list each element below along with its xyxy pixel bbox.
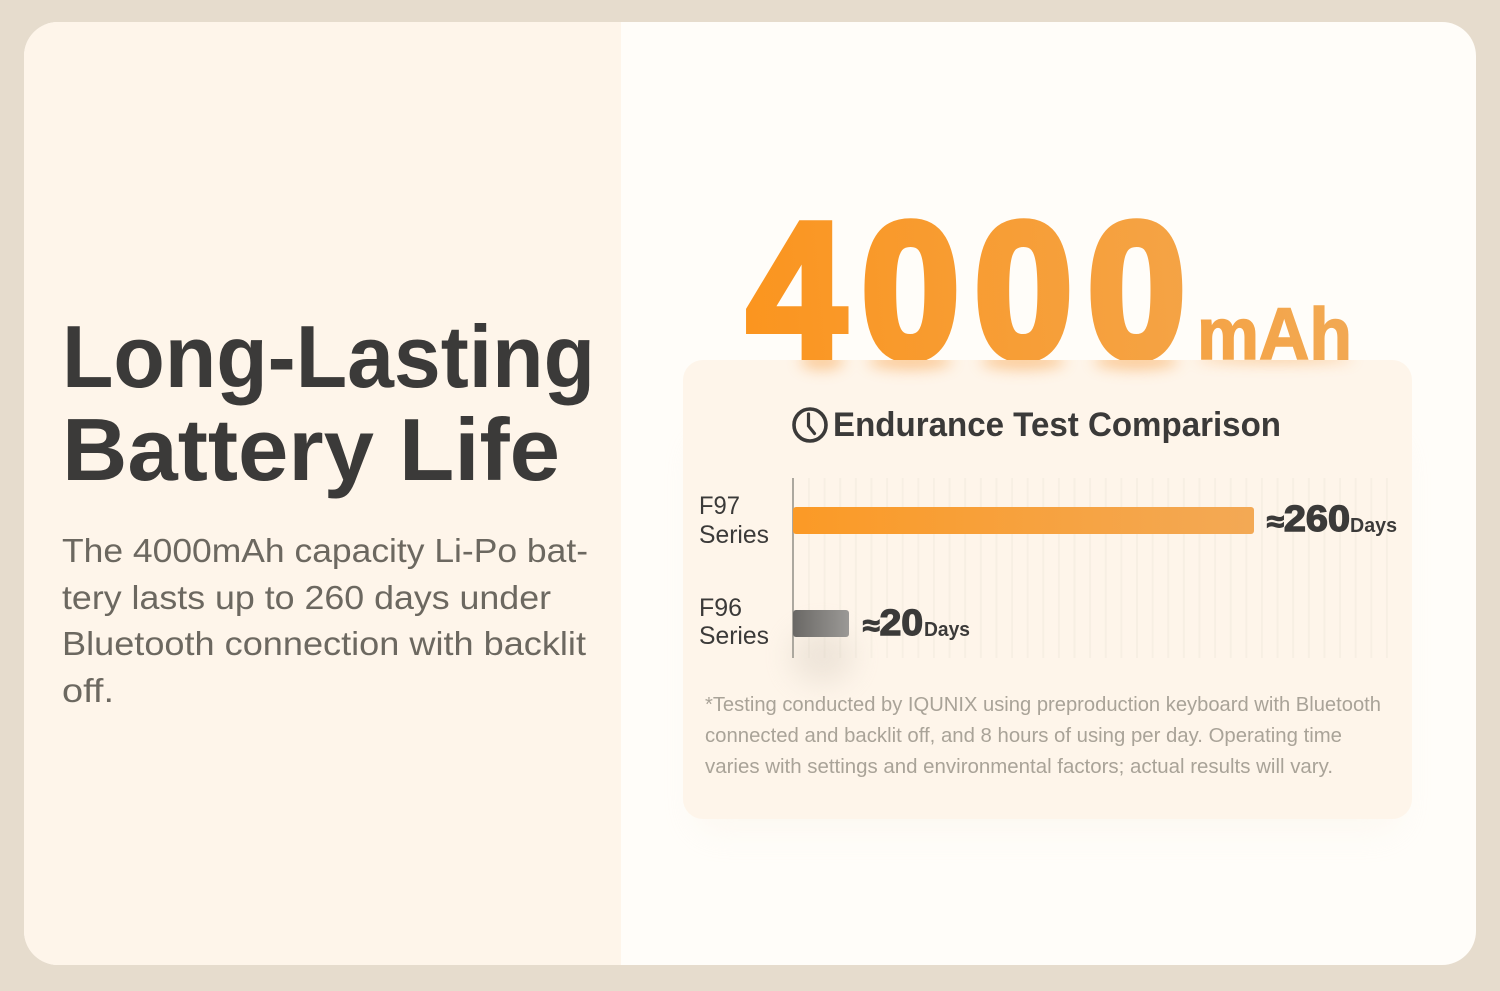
bar chart [699, 478, 1397, 684]
value: F96 [863, 602, 970, 643]
label: F96 Series [699, 594, 769, 650]
bar: F96 [793, 610, 849, 637]
label: F96 Series: F96 [699, 594, 742, 622]
value: F96: Days [924, 619, 970, 641]
icon: clock [794, 409, 826, 441]
axis [792, 478, 794, 658]
value: F97: ≈260 [1267, 498, 1350, 539]
footnote: connected and backlit off, and 8 hours of using per day. Operating time [705, 724, 1342, 747]
description text: off. [62, 672, 114, 709]
description text: Bluetooth connection with backlit [62, 625, 586, 662]
card heading [794, 406, 1281, 444]
title: Battery Life [62, 400, 560, 499]
title [62, 307, 595, 499]
footnote: varies with settings and environmental factors; actual results will vary. [705, 755, 1333, 778]
panel: comparison card [683, 360, 1412, 819]
shadow under F96 bar [790, 628, 854, 684]
mAh unit: mAh [1197, 294, 1352, 375]
footnote: *Testing conducted by IQUNIX using preproduction keyboard with Bluetooth [705, 693, 1381, 716]
title: Long-Lasting [62, 307, 595, 406]
label: F97 Series [699, 492, 769, 549]
label: F97 Series: F97 [699, 492, 740, 520]
big capacity figure [746, 218, 1348, 360]
description text: The 4000mAh capacity Li-Po bat- [62, 532, 588, 569]
value: F97 [1267, 498, 1397, 539]
bar: F97 [793, 507, 1254, 534]
label: F97 Series: Series [699, 521, 769, 549]
value: F97: Days [1350, 515, 1397, 537]
value: F96: ≈20 [863, 602, 923, 643]
label: F96 Series: Series [699, 622, 769, 650]
digit reflection glows [800, 352, 1353, 370]
description text: tery lasts up to 260 days under [62, 579, 551, 616]
heading text: Endurance Test Comparison [833, 406, 1281, 444]
panel: left background [24, 22, 621, 965]
card soft shadow [695, 440, 1400, 832]
4000 digits: 4000 [747, 183, 1186, 399]
footnote [705, 693, 1381, 778]
description text [62, 532, 588, 709]
